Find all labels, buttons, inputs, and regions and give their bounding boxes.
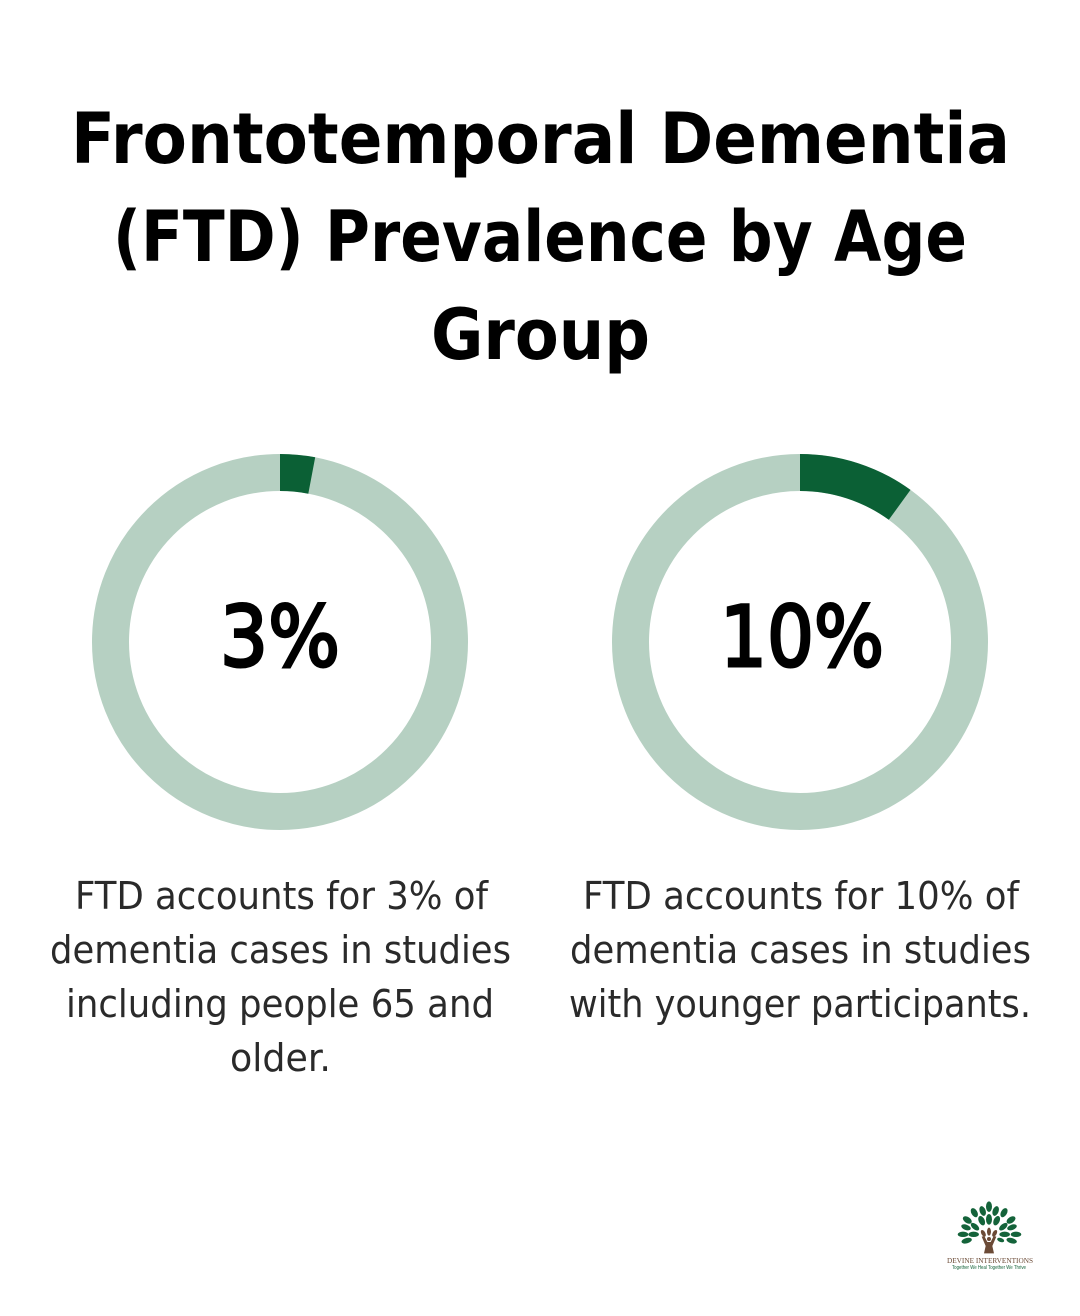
description: 3%: FTD accounts for 3% of: [75, 874, 490, 918]
value: 10%: 10%: [720, 588, 884, 686]
logo: Devine Interventions: [947, 1201, 1033, 1271]
panel: 10% statistic: [569, 454, 1031, 1026]
title: Group: [431, 294, 650, 376]
title: [71, 98, 1010, 376]
description: 10%: with younger participants.: [569, 982, 1031, 1026]
description: 3%: [50, 874, 511, 1080]
description: 10%: [569, 874, 1031, 1026]
description: 3%: dementia cases in studies: [50, 928, 511, 972]
panel: 3% statistic: [50, 454, 511, 1080]
description: 10%: FTD accounts for 10% of: [583, 874, 1021, 918]
donut chart: 10%: [630, 454, 970, 812]
donut chart: 3%: [110, 454, 450, 812]
value: 3%: 3%: [220, 588, 340, 686]
title: Frontotemporal Dementia: [71, 98, 1010, 180]
description: 10%: dementia cases in studies: [570, 928, 1031, 972]
logo tagline: Together We Heal Together We Thrive: [952, 1265, 1026, 1271]
description: 3%: older.: [230, 1036, 331, 1080]
icon: tree with leaves and figure: [958, 1201, 1021, 1253]
description: 3%: including people 65 and: [66, 982, 494, 1026]
logo name: DEVINE INTERVENTIONS: [947, 1257, 1033, 1265]
title: (FTD) Prevalence by Age: [113, 196, 967, 278]
